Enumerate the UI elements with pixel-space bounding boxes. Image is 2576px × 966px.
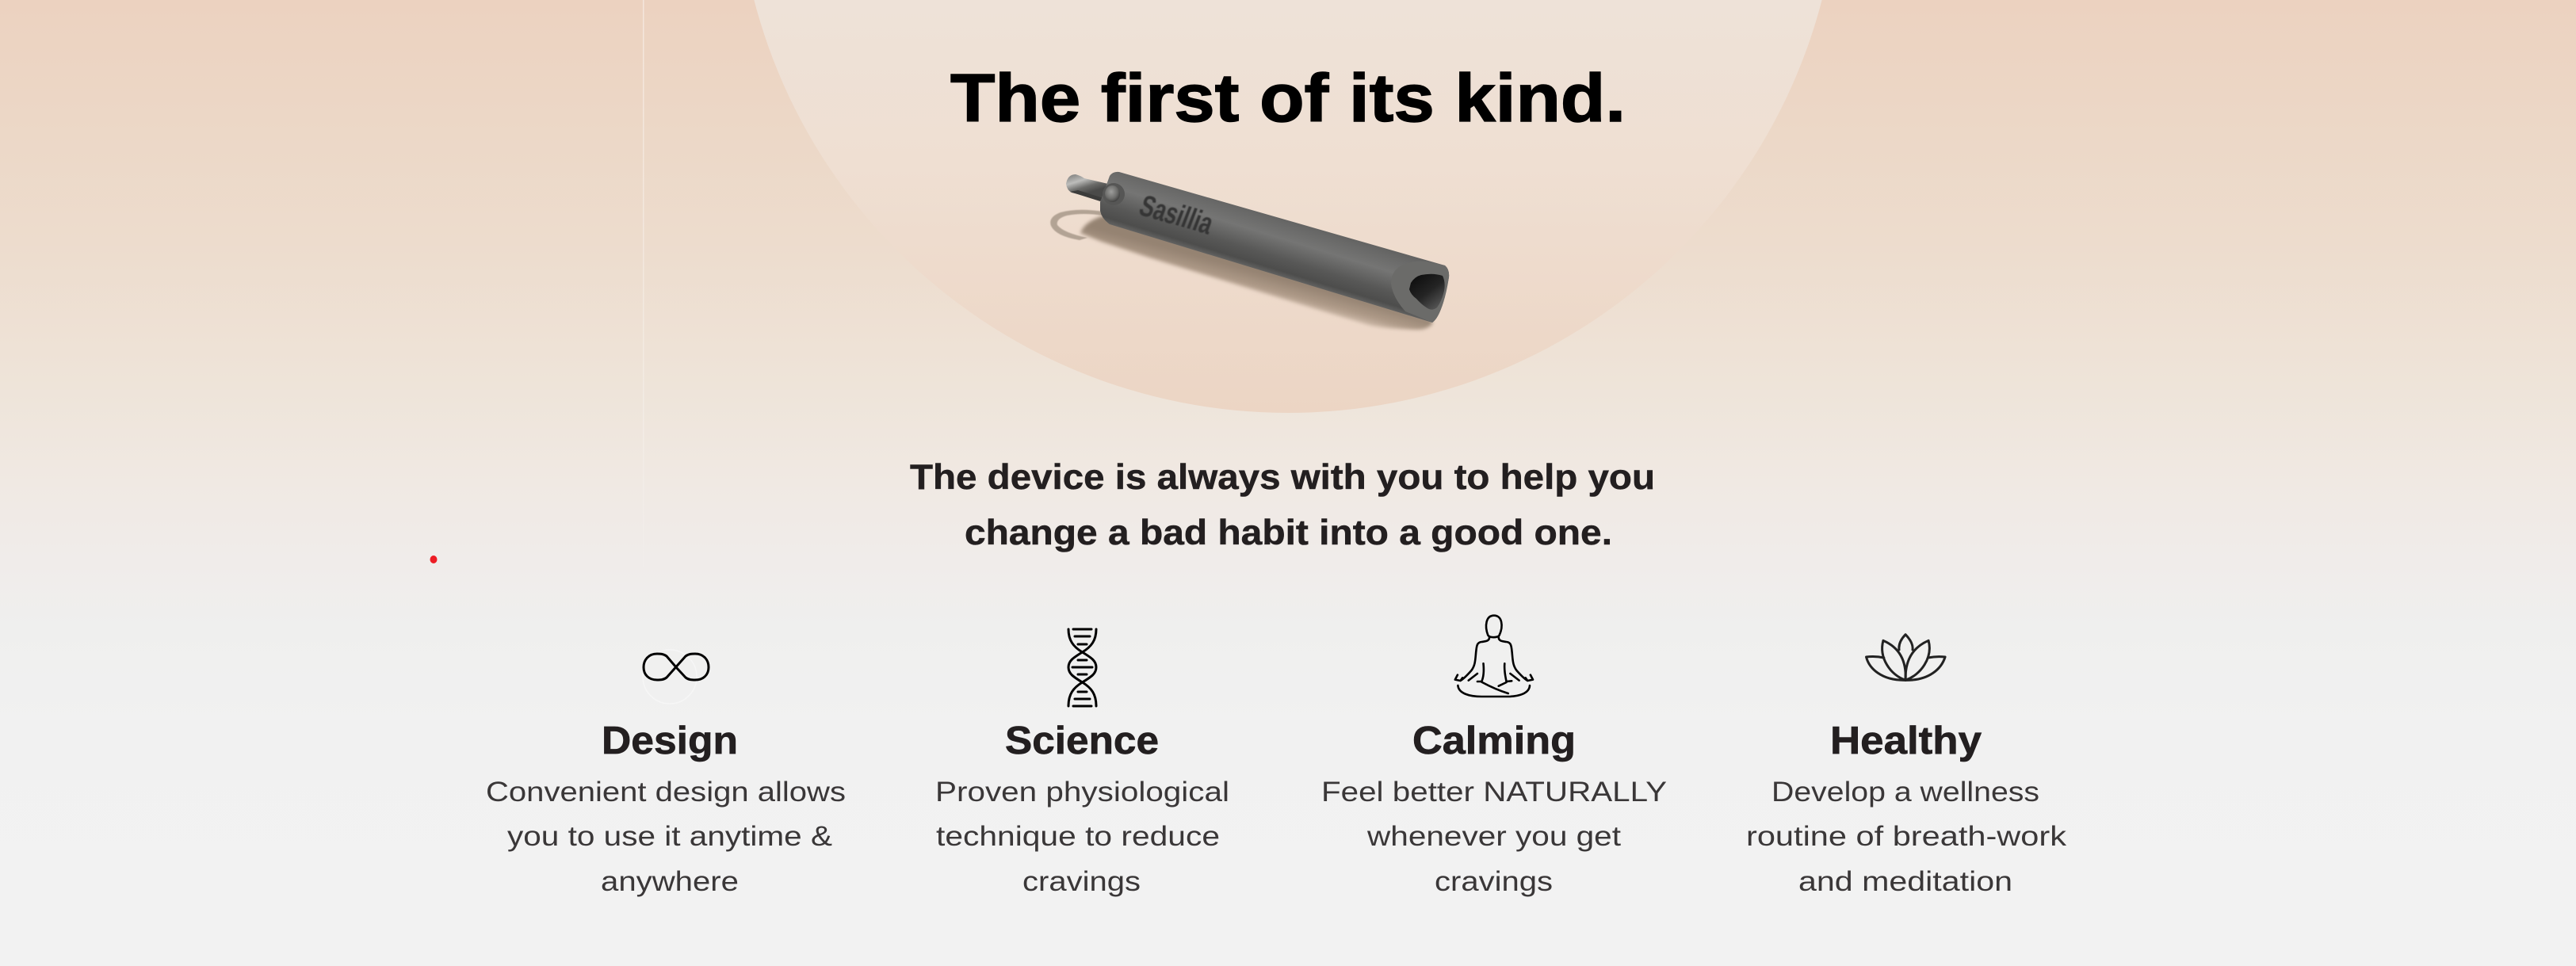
- feature: Science: [935, 629, 1229, 897]
- description: [1746, 777, 2067, 897]
- product: Sasillia pen device: [1050, 172, 1449, 330]
- description: Feel better NATURALLY: [1321, 777, 1667, 808]
- heading: Science: [1005, 720, 1159, 762]
- cast shadow: [1080, 216, 1432, 330]
- heading: Design: [602, 720, 738, 762]
- description: [935, 777, 1229, 897]
- red dot: [430, 556, 438, 563]
- icon: infinity: [643, 650, 709, 704]
- key ring stem: [1066, 174, 1111, 202]
- subheading: change a bad habit into a good one.: [965, 514, 1612, 552]
- brand name on pen: Sasillia: [1135, 189, 1218, 241]
- description: Develop a wellness: [1771, 777, 2039, 808]
- icon: DNA helix: [1068, 629, 1096, 706]
- pen body: [1100, 172, 1449, 323]
- feature: Calming: [1321, 616, 1667, 897]
- description: cravings: [1022, 866, 1141, 897]
- icon: meditating person: [1455, 616, 1533, 697]
- description: Convenient design allows: [486, 777, 846, 808]
- faint vertical hairline: [643, 0, 644, 567]
- large circle behind product: [736, 0, 1840, 413]
- ring shadow: [1050, 210, 1103, 240]
- description: routine of breath-work: [1746, 821, 2067, 852]
- heading: Healthy: [1830, 720, 1982, 762]
- description: anywhere: [601, 866, 739, 897]
- description: and meditation: [1798, 866, 2012, 897]
- description: [486, 777, 846, 897]
- description: whenever you get: [1366, 821, 1621, 852]
- description: you to use it anytime &: [507, 821, 832, 852]
- pen opening: [1409, 274, 1445, 310]
- pin: [1103, 183, 1125, 205]
- title: The first of its kind.: [950, 61, 1626, 136]
- description: technique to reduce: [936, 821, 1220, 852]
- description: cravings: [1435, 866, 1553, 897]
- description: [1321, 777, 1667, 897]
- subheading: [910, 458, 1655, 552]
- description: Proven physiological: [935, 777, 1229, 808]
- feature: Healthy: [1746, 635, 2067, 897]
- subheading: The device is always with you to help you: [910, 458, 1655, 497]
- icon: lotus: [1867, 635, 1945, 680]
- feature: Design: [486, 650, 846, 897]
- pen end face: [1391, 262, 1449, 323]
- heading: Calming: [1412, 720, 1576, 762]
